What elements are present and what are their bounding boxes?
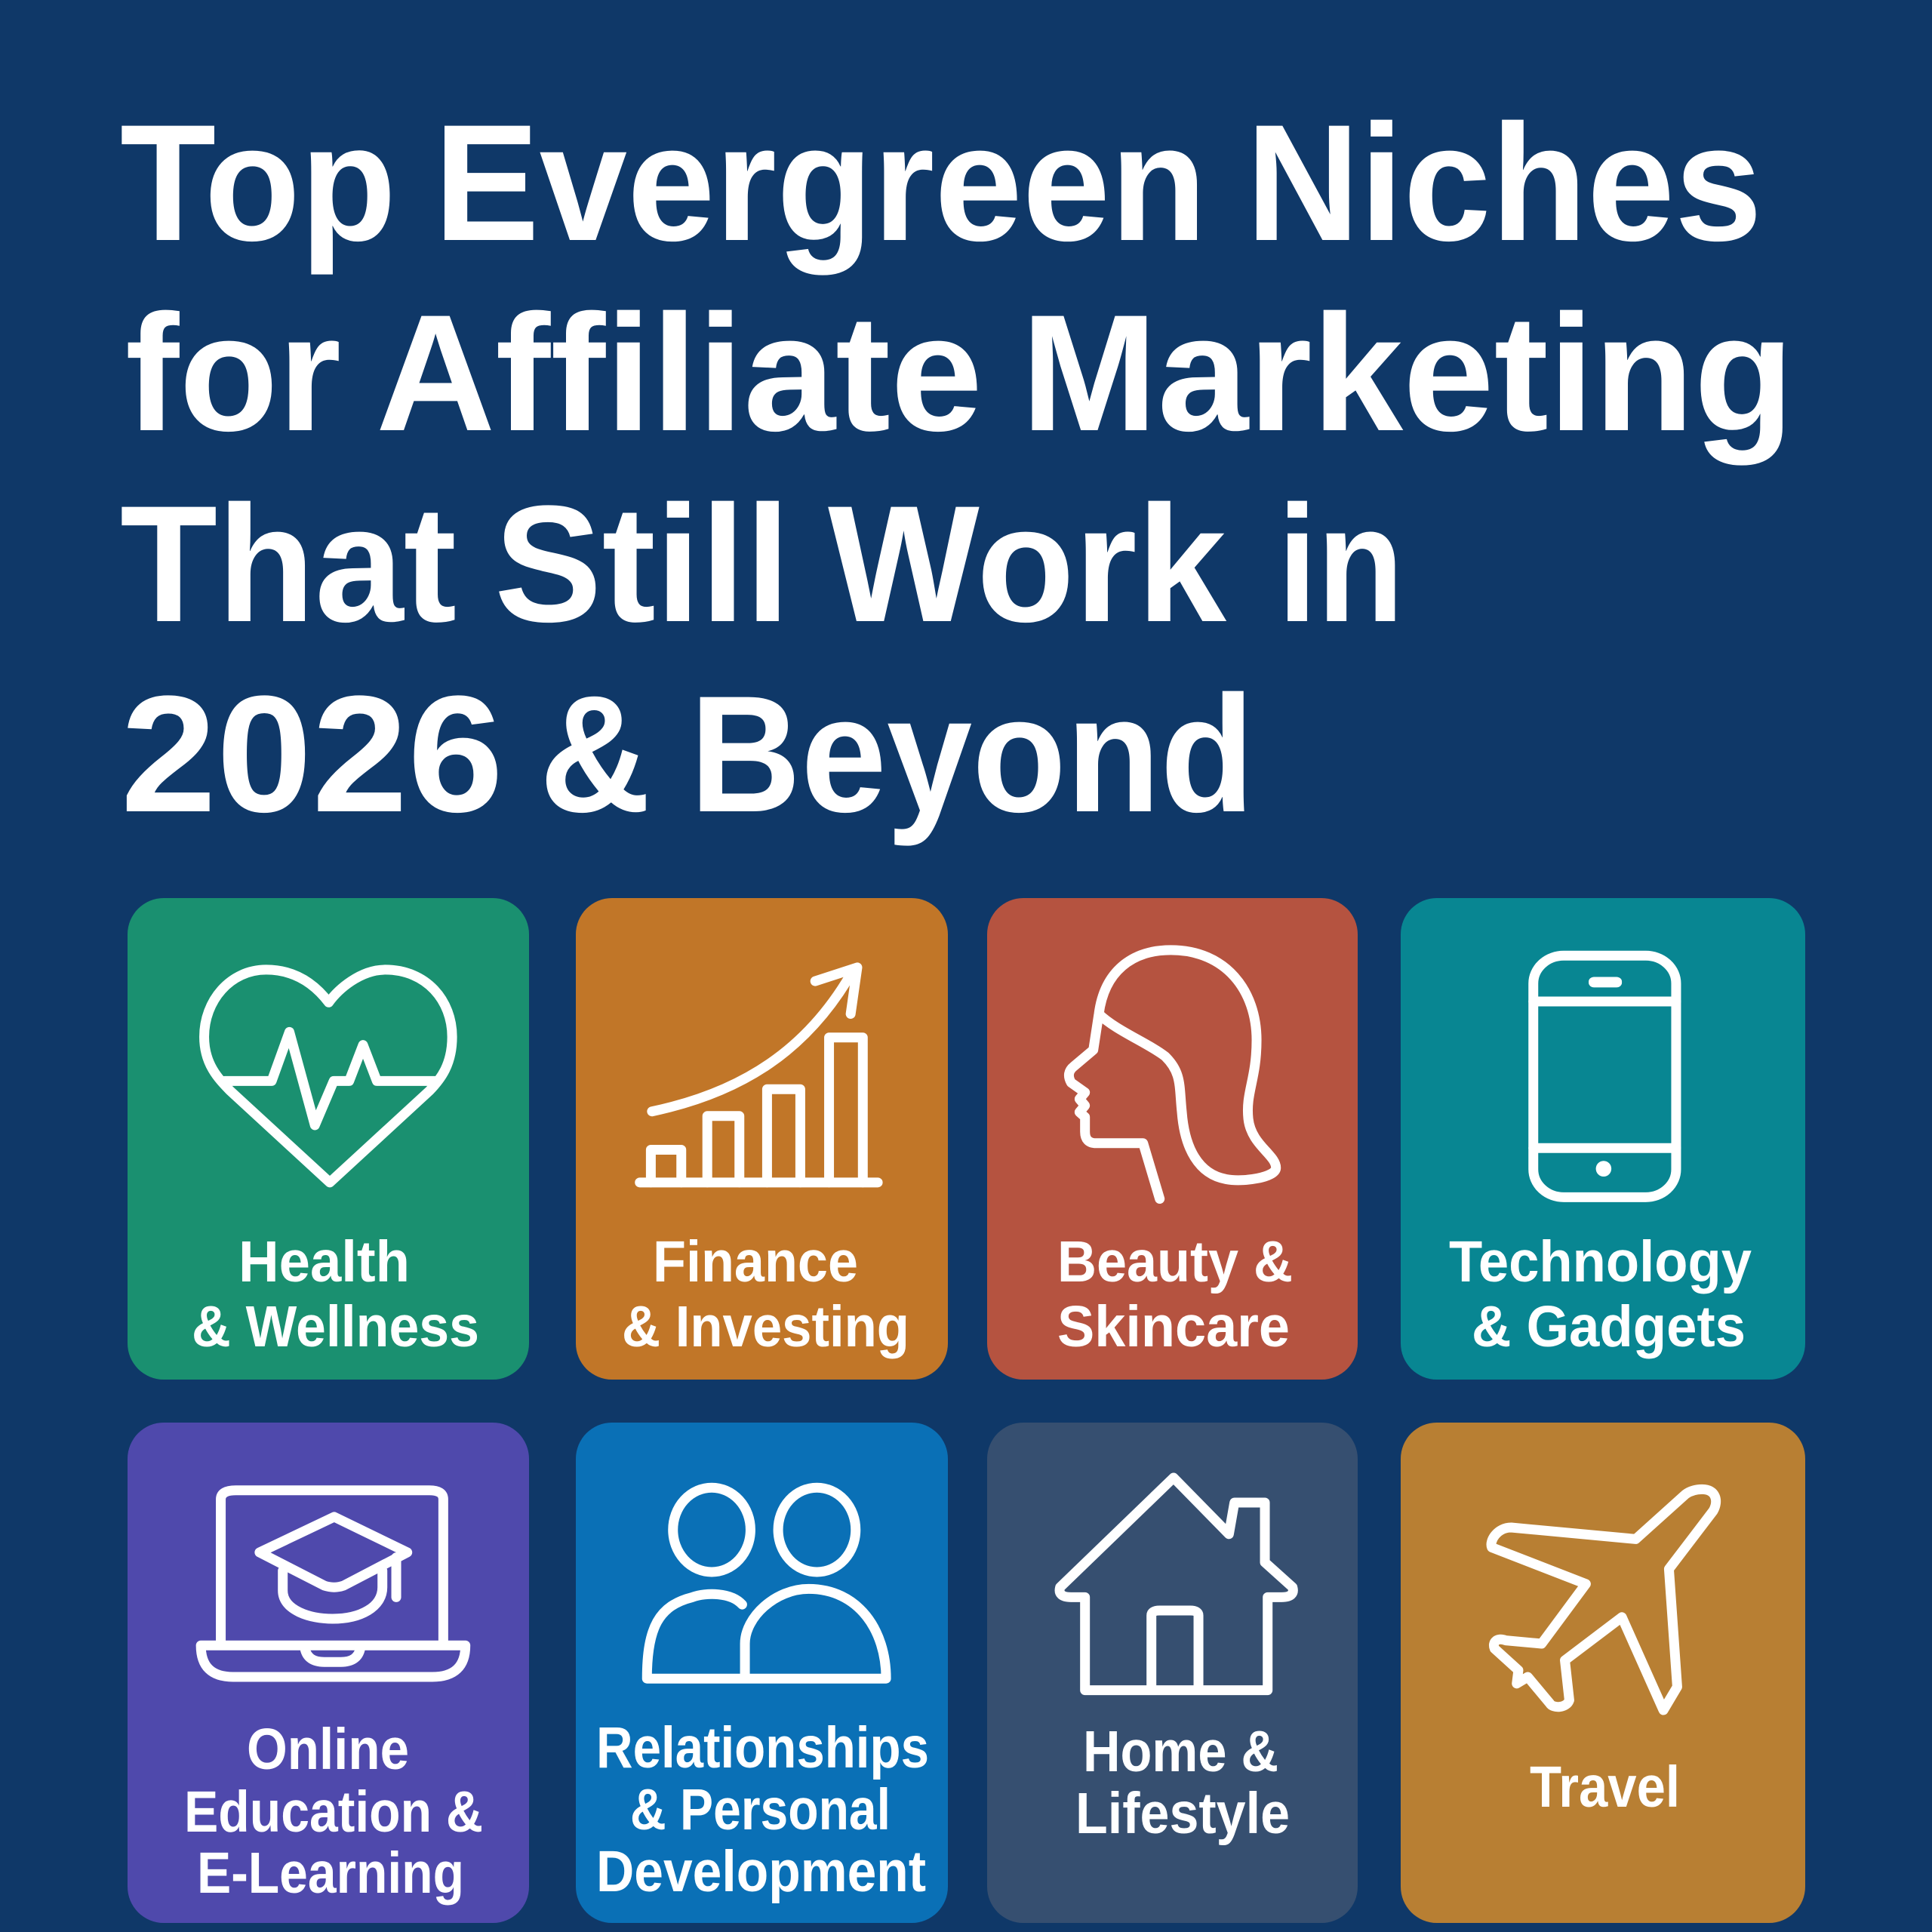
icon: woman's head in profile [1069, 950, 1276, 1199]
title: That [120, 471, 457, 657]
icon: laptop with graduation cap [201, 1491, 466, 1677]
label: beauty and skincare [1057, 1229, 1293, 1359]
title: Still [494, 471, 790, 657]
label: online education and e-learning: Education & [184, 1780, 483, 1844]
panel: finance and investing [576, 898, 948, 1380]
label: health and wellness [192, 1229, 479, 1359]
title: for [125, 280, 341, 466]
panel: travel [1401, 1423, 1805, 1923]
panel: technology and gadgets [1401, 898, 1805, 1380]
label: home and lifestyle: Home & [1083, 1719, 1278, 1784]
title: Niches [1246, 90, 1762, 275]
label: health and wellness: Health [238, 1229, 410, 1294]
title: Marketing [1021, 280, 1794, 466]
panel: home and lifestyle [987, 1423, 1358, 1923]
label: travel: Travel [1530, 1755, 1680, 1820]
title: Beyond [690, 661, 1254, 847]
label: relationships and personal development: & Personal [630, 1777, 891, 1842]
label: relationships and personal development [596, 1715, 929, 1904]
label: health and wellness: & Wellness [192, 1294, 479, 1359]
title: 2026 [121, 661, 503, 847]
label: finance and investing: & Investing [622, 1294, 909, 1359]
title: Affiliate [376, 280, 983, 466]
icon: airplane [1491, 1489, 1716, 1710]
label: beauty and skincare: Beauty & [1057, 1229, 1293, 1294]
label: home and lifestyle: Lifestyle [1075, 1781, 1290, 1846]
icon: two people [647, 1487, 886, 1678]
label: technology and gadgets [1449, 1229, 1752, 1359]
panel: online education and e-learning [128, 1423, 529, 1923]
label: online education and e-learning [184, 1717, 483, 1906]
title: Top [120, 90, 396, 275]
label: home and lifestyle [1075, 1719, 1290, 1846]
title: Work [828, 471, 1227, 657]
panel: beauty and skincare [987, 898, 1358, 1380]
label: beauty and skincare: Skincare [1057, 1294, 1290, 1359]
label: technology and gadgets: & Gadgets [1472, 1294, 1746, 1359]
icon: rising bar chart with arrow [640, 968, 878, 1183]
panel: health and wellness [128, 898, 529, 1380]
label: relationships and personal development: Development [596, 1839, 926, 1904]
label: online education and e-learning: Online [247, 1717, 409, 1782]
label: finance and investing: Finance [653, 1229, 858, 1294]
title: Evergreen [434, 90, 1207, 275]
icon: house [1060, 1478, 1293, 1690]
label: relationships and personal development: Relationships [596, 1715, 929, 1780]
label: online education and e-learning: E-Learning [197, 1841, 464, 1906]
title: & [540, 661, 651, 847]
panel: relationships and personal development [576, 1423, 948, 1923]
title [120, 90, 1794, 847]
label: finance and investing [622, 1229, 909, 1359]
icon: smartphone [1534, 955, 1676, 1197]
title: in [1278, 471, 1404, 657]
label: technology and gadgets: Technology [1449, 1229, 1752, 1294]
icon: heart with pulse line [205, 970, 452, 1183]
